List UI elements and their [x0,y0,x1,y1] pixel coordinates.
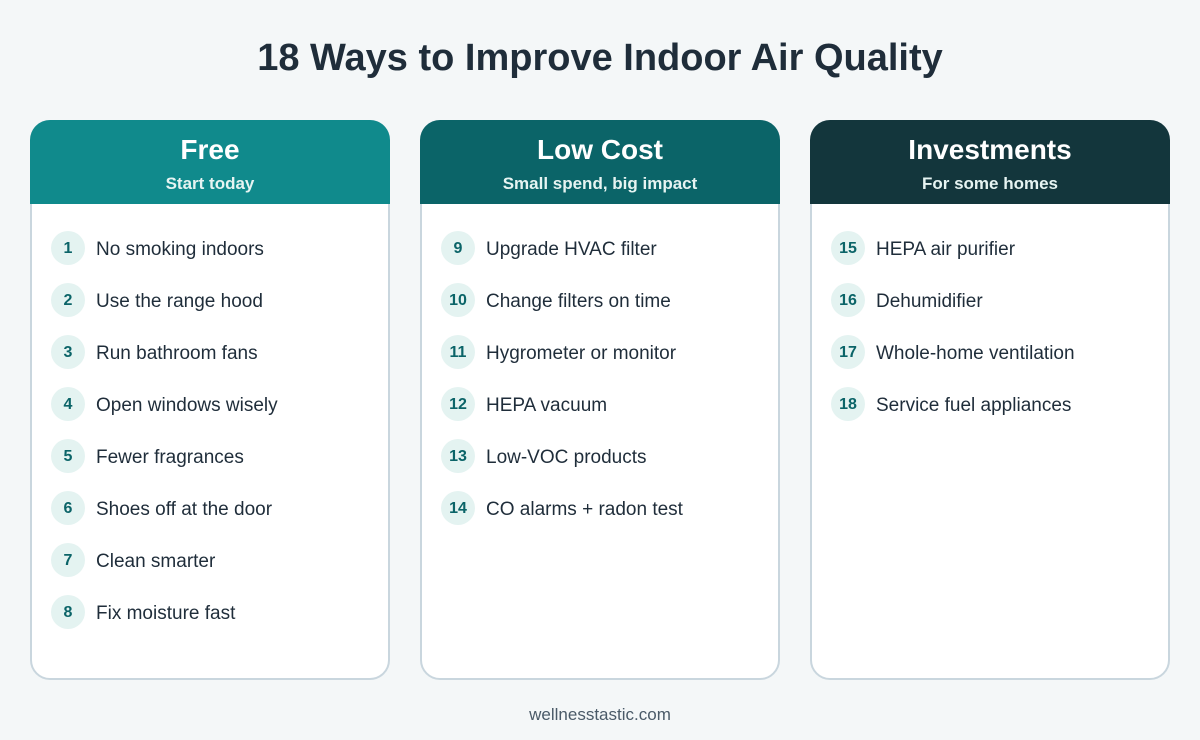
item 1 [51,231,264,265]
item 13: 13 [449,448,467,465]
item 12: 12 [449,396,467,413]
panel: investments [810,120,1170,680]
item 2: Use the range hood [96,291,263,312]
item 8: Fix moisture fast [96,603,235,624]
item 6 [51,491,272,525]
item 4: 4 [64,396,72,413]
item 11: Hygrometer or monitor [486,343,676,364]
item 14 [441,491,683,525]
item 3: Run bathroom fans [96,343,258,364]
item 18: 18 [839,396,857,413]
panel header: investments: Investments [908,134,1072,165]
panel header: free [30,120,390,204]
panel: low cost [420,120,780,680]
item 9: Upgrade HVAC filter [486,239,657,260]
panel header: low cost [420,120,780,204]
item 3 [51,335,258,369]
item 17 [831,335,1075,369]
item 18: Service fuel appliances [876,395,1071,416]
item 1: No smoking indoors [96,239,264,260]
panel header: free: Free [180,134,240,165]
item 11 [441,335,676,369]
item 7: Clean smarter [96,551,215,572]
item 8 [51,595,236,629]
panel: free [30,120,390,680]
panel header: free: Start today [166,174,254,193]
panel header: low cost: Low Cost [537,134,663,165]
item 2 [51,283,263,317]
item 3: 3 [64,344,72,361]
item 10 [441,283,671,317]
item 4: Open windows wisely [96,395,278,416]
item 5: Fewer fragrances [96,447,244,468]
item 17: 17 [839,344,857,361]
item 9 [441,231,657,265]
item 7: 7 [64,552,72,569]
title: 18 Ways to Improve Indoor Air Quality [257,37,943,79]
item 2: 2 [64,292,72,309]
item 16: Dehumidifier [876,291,983,312]
item 9: 9 [454,240,462,257]
item 15: HEPA air purifier [876,239,1015,260]
item 15 [831,231,1015,265]
item 14: 14 [449,500,467,517]
item 12 [441,387,607,421]
panel header: investments [810,120,1170,204]
item 14: CO alarms + radon test [486,499,683,520]
item 11: 11 [450,344,466,361]
item 6: Shoes off at the door [96,499,272,520]
item 13: Low-VOC products [486,447,647,468]
item 16 [831,283,983,317]
item 17: Whole-home ventilation [876,343,1075,364]
item 13 [441,439,647,473]
item 10: 10 [449,292,467,309]
item 16: 16 [839,292,857,309]
footer source: wellnesstastic.com [529,705,671,724]
item 12: HEPA vacuum [486,395,607,416]
item 6: 6 [64,500,72,517]
item 7 [51,543,215,577]
item 1: 1 [64,240,72,257]
item 4 [51,387,278,421]
item 15: 15 [839,240,857,257]
item 18 [831,387,1071,421]
item 5: 5 [64,448,72,465]
item 5 [51,439,244,473]
panel header: low cost: Small spend, big impact [503,174,697,193]
item 8: 8 [64,604,72,621]
panel header: investments: For some homes [922,174,1058,193]
item 10: Change filters on time [486,291,671,312]
